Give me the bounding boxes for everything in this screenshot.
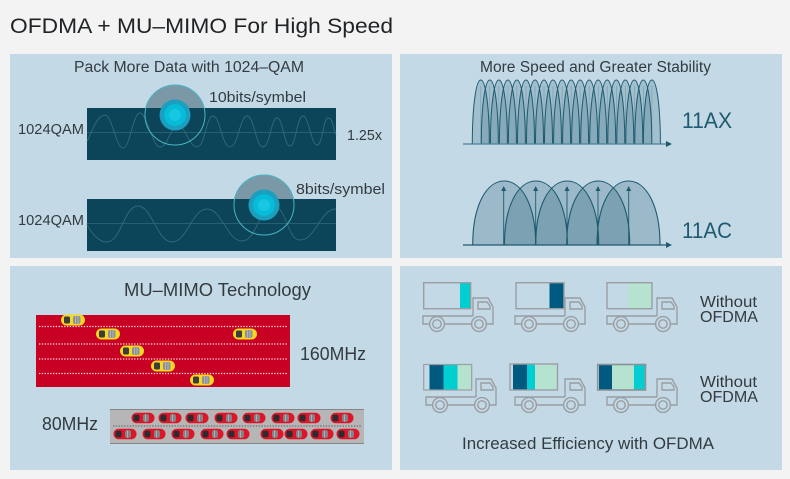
label: without OFDMA top: Without bbox=[700, 294, 758, 311]
road: 80MHz grey bbox=[110, 409, 364, 444]
label: 1024QAM top: 1024QAM bbox=[18, 122, 84, 138]
label: 10bits/symbel: 10bits/symbel bbox=[209, 89, 306, 106]
label: without OFDMA bottom: Without bbox=[700, 374, 758, 391]
cars: yellow bbox=[61, 314, 257, 386]
label: 1024QAM bottom: 1024QAM bbox=[18, 213, 84, 229]
signal circle: 8 bits bbox=[234, 175, 294, 235]
label: without OFDMA top: OFDMA bbox=[700, 309, 758, 326]
heading: more speed: More Speed and Greater Stability bbox=[480, 59, 711, 76]
label: 8bits/symbel: 8bits/symbel bbox=[296, 181, 385, 198]
label: without OFDMA bottom bbox=[700, 374, 758, 406]
panel: 1024-QAM bbox=[10, 54, 392, 258]
truck 2 bbox=[515, 282, 585, 331]
label: without OFDMA top bbox=[700, 294, 758, 326]
truck 1 bbox=[423, 282, 493, 331]
truck 4 bbox=[424, 364, 496, 412]
label: 160MHz: 160MHz bbox=[300, 344, 366, 364]
label: 80MHz: 80MHz bbox=[42, 414, 98, 434]
panel: speed and stability bbox=[400, 54, 782, 258]
label: 11AC: 11AC bbox=[682, 218, 732, 243]
wave band: 8 bits bbox=[87, 199, 336, 251]
wave band: 10 bits bbox=[87, 108, 336, 160]
panel: OFDMA efficiency bbox=[400, 266, 782, 470]
signal circle: 10 bits bbox=[145, 85, 205, 145]
truck 6 bbox=[598, 364, 677, 412]
title: OFDMA + MU–MIMO For High Speed bbox=[10, 14, 393, 38]
panel: MU-MIMO bbox=[10, 266, 392, 470]
heading: pack more data: Pack More Data with 1024–QAM bbox=[74, 59, 304, 76]
cars: red bbox=[114, 413, 360, 439]
label: without OFDMA bottom: OFDMA bbox=[700, 389, 758, 406]
label: 11AX: 11AX bbox=[682, 108, 732, 133]
truck 5 bbox=[510, 364, 585, 412]
road: 160MHz red bbox=[36, 314, 290, 387]
chart: 11AC subcarriers bbox=[463, 181, 672, 248]
truck 3 bbox=[607, 282, 677, 331]
chart: 11AX subcarriers bbox=[463, 80, 672, 147]
label: 1.25x: 1.25x bbox=[347, 128, 383, 144]
caption: increased efficiency: Increased Efficiency with OFDMA bbox=[462, 434, 715, 453]
heading: MU-MIMO technology: MU–MIMO Technology bbox=[124, 280, 311, 300]
